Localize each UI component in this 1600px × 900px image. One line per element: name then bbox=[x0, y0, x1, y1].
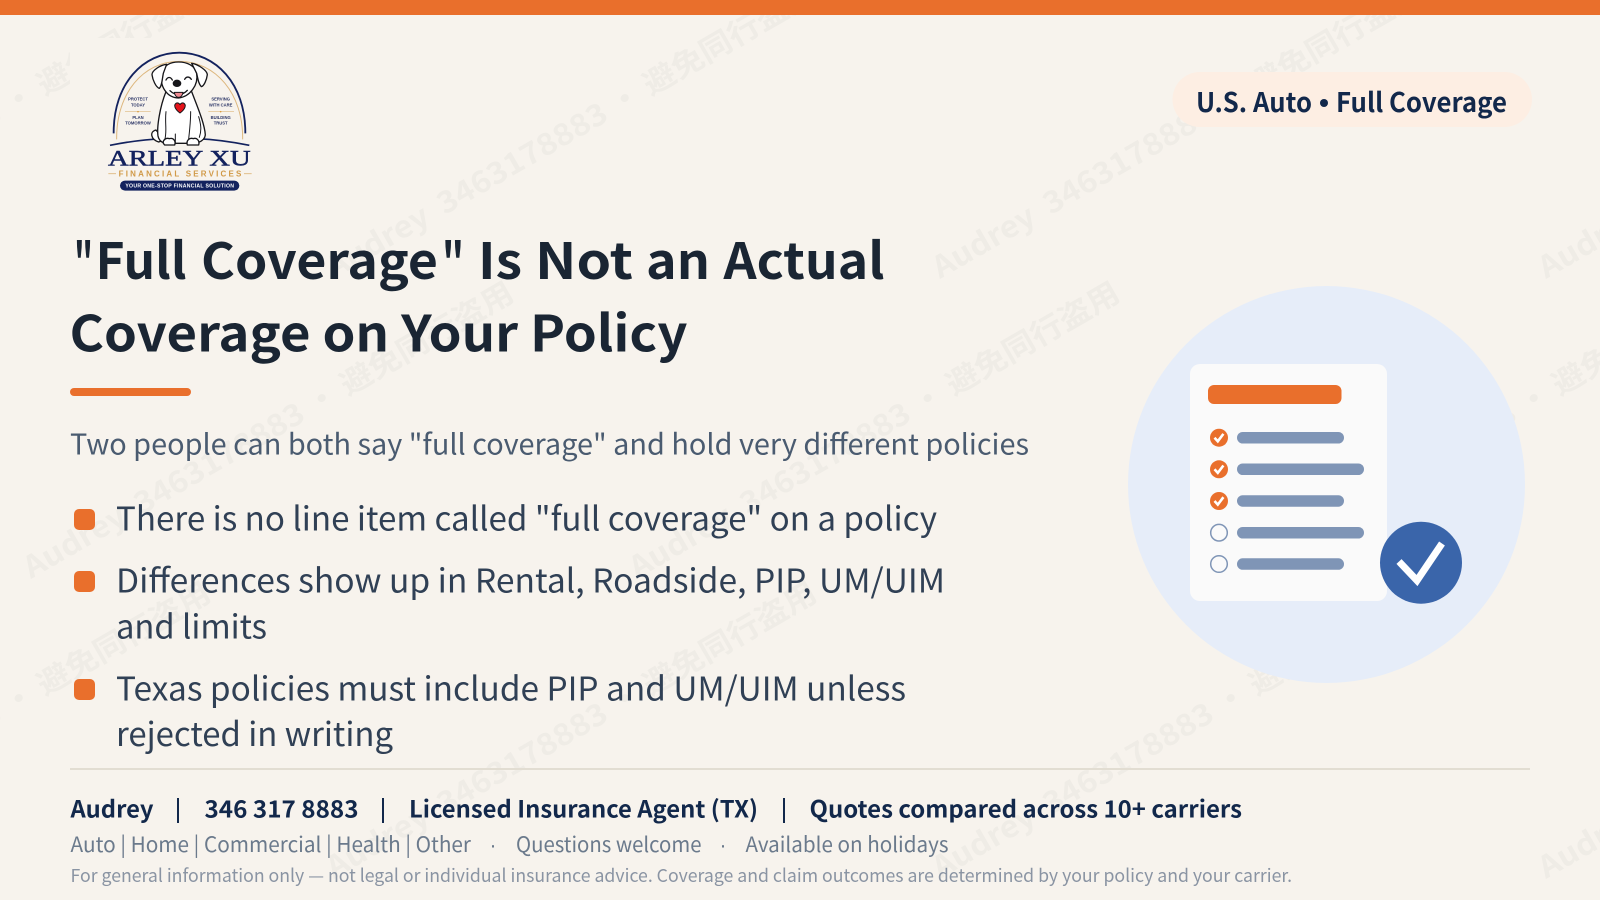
logo background bbox=[70, 38, 286, 208]
logo side mottos: TRUST bbox=[214, 121, 228, 126]
title: Actual bbox=[722, 222, 884, 294]
watermark pattern: Audrey 3463178883 • 避免同行盗用 bbox=[316, 569, 823, 887]
title: Coverage on Your Policy bbox=[70, 294, 688, 366]
logo side mottos: BUILDING bbox=[211, 115, 231, 120]
logo arches bbox=[110, 53, 249, 145]
title accent underline bbox=[70, 388, 191, 396]
footer contact line: 346 317 8883 bbox=[204, 790, 358, 824]
footer contact line: Licensed Insurance Agent (TX) bbox=[409, 790, 758, 824]
bullet 3: rejected in writing bbox=[116, 708, 393, 756]
title: an bbox=[646, 222, 710, 294]
title: Not bbox=[535, 222, 633, 294]
unchecked rows bbox=[1211, 524, 1364, 572]
topic pill bbox=[1172, 72, 1532, 127]
logo: Arley Xu Financial Services bbox=[108, 53, 252, 191]
bullet list bbox=[74, 492, 945, 756]
logo side mottos: WITH CARE bbox=[209, 102, 233, 107]
footer services line: Auto | Home | Commercial | Health | Other bbox=[70, 829, 472, 859]
footer services line: Available on holidays bbox=[746, 829, 949, 859]
logo side mottos: PLAN bbox=[132, 115, 144, 120]
subtitle: Two people can both say "full coverage" and hold very different policies bbox=[70, 422, 1029, 464]
title: " bbox=[442, 222, 464, 294]
footer contact line: Quotes compared across 10+ carriers bbox=[810, 790, 1242, 824]
logo side mottos: PROTECT bbox=[128, 97, 148, 102]
topic pill: U.S. Auto bbox=[1196, 81, 1312, 120]
bullet 2: and limits bbox=[116, 600, 267, 648]
title: Full bbox=[96, 222, 186, 294]
bullet 2 bbox=[74, 554, 945, 648]
bullet 3 bbox=[74, 662, 906, 756]
logo side mottos: TODAY bbox=[131, 102, 145, 107]
document card bbox=[1190, 364, 1387, 601]
watermark pattern: Audrey 3463178883 • 避免同行盗用 bbox=[922, 569, 1429, 887]
footer services line: Questions welcome bbox=[516, 829, 702, 859]
logo wordmark: ARLEY XU bbox=[108, 146, 251, 171]
title bbox=[70, 222, 884, 366]
logo side mottos bbox=[125, 97, 234, 126]
logo sub-brand: FINANCIAL SERVICES bbox=[119, 170, 242, 179]
top accent bar bbox=[0, 0, 1600, 15]
blue check badge bbox=[1380, 522, 1462, 604]
checklist illustration bbox=[1128, 286, 1525, 683]
logo tagline pill: YOUR ONE-STOP FINANCIAL SOLUTION bbox=[125, 183, 234, 189]
watermark pattern: Audrey 3463178883 • 避免同行盗用 bbox=[619, 269, 1126, 587]
title: Coverage bbox=[201, 222, 438, 294]
title: " bbox=[74, 222, 93, 294]
footer services line bbox=[70, 829, 949, 859]
illustration backdrop circle bbox=[1128, 286, 1525, 683]
checked rows bbox=[1210, 429, 1364, 510]
bullet 3: Texas policies must include PIP and UM/UIM unless bbox=[116, 662, 906, 710]
footer services line: · bbox=[720, 834, 726, 857]
logo puppy bbox=[152, 62, 207, 145]
watermark pattern: Audrey 3463178883 • 避免同行盗用 bbox=[13, 269, 520, 587]
logo side mottos: TOMORROW bbox=[125, 121, 151, 126]
bullet 2: Differences show up in Rental, Roadside, PIP, UM/UIM bbox=[116, 554, 945, 602]
footer divider bbox=[70, 768, 1530, 770]
footer contact line bbox=[69, 790, 1242, 824]
topic pill: Full Coverage bbox=[1336, 81, 1507, 120]
bullet 1: There is no line item called "full coverage" on a policy bbox=[116, 492, 937, 540]
footer services line: · bbox=[490, 834, 496, 857]
logo tagline pill bbox=[120, 181, 239, 191]
footer contact line: Audrey bbox=[69, 790, 154, 824]
logo side mottos: SERVING bbox=[211, 97, 230, 102]
title: Is bbox=[478, 222, 522, 294]
footer disclaimer: For general information only — not legal or individual insurance advice. Coverage and claim outcomes are determined by your policy and your carrier. bbox=[70, 862, 1292, 888]
